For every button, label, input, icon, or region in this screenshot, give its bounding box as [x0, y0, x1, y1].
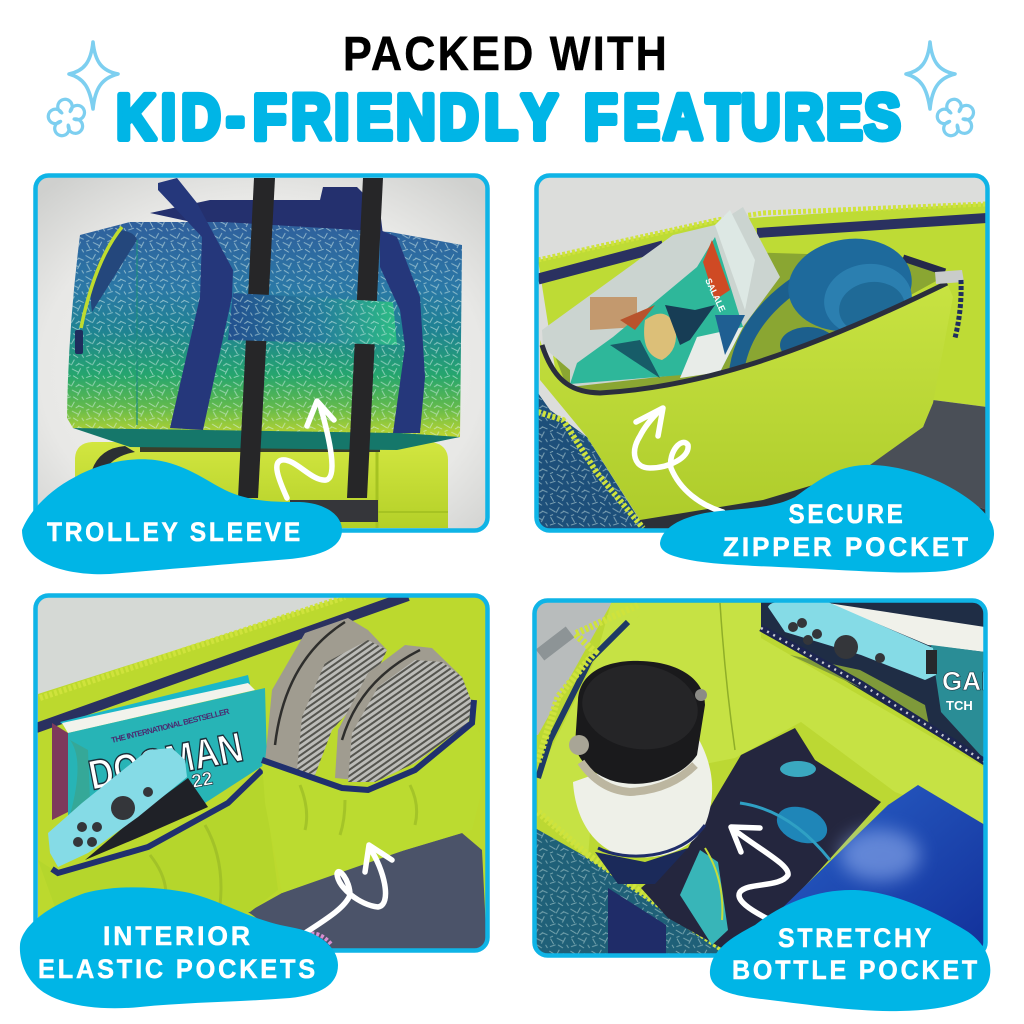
callout: trolley sleeve	[22, 459, 342, 574]
panel: interior elastic pockets	[20, 596, 488, 1008]
left wall and zippers	[538, 605, 721, 948]
front pocket	[540, 270, 964, 520]
book	[52, 675, 267, 820]
lining	[38, 596, 487, 950]
right slipper	[335, 645, 472, 782]
green interior	[538, 203, 987, 420]
arrow	[277, 401, 334, 498]
back straps	[150, 187, 383, 235]
label text: INTERIOR	[103, 921, 253, 951]
bottle	[569, 657, 712, 884]
label text: BOTTLE POCKET	[732, 955, 980, 985]
label text: ELASTIC POCKETS	[38, 954, 318, 984]
inner lining	[590, 603, 985, 826]
snack bag: SALALE	[703, 277, 727, 313]
heading: kid-friendly features: KID-FRIENDLY FEATURES	[116, 81, 901, 153]
callout: trolley sleeve: TROLLEY SLEEVE	[47, 517, 303, 547]
arrow	[731, 827, 788, 920]
panel: stretchy bottle pocket	[534, 600, 997, 1011]
left strap	[158, 178, 233, 430]
arrow	[635, 408, 723, 512]
suitcase	[75, 442, 448, 528]
top pocket: TCH	[946, 698, 973, 713]
shirt with rockets	[641, 728, 881, 950]
book: THE INTERNATIONAL BESTSELLER	[110, 707, 231, 745]
dark gap under bag	[639, 485, 986, 528]
zipper tape	[36, 596, 408, 728]
panel: trolley sleeve	[22, 176, 488, 574]
panel: secure zipper pocket	[536, 176, 994, 573]
arrow	[302, 845, 392, 935]
left elastic pocket	[50, 768, 263, 912]
switch console	[768, 602, 937, 680]
callout: secure zipper pocket	[660, 465, 994, 573]
label text	[732, 923, 980, 985]
right elastic pocket	[262, 700, 482, 893]
headphones	[737, 231, 918, 368]
label text: ZIPPER POCKET	[723, 532, 971, 562]
top pocket: GAL	[942, 666, 997, 696]
top pocket	[761, 602, 997, 765]
book: 22	[190, 768, 215, 793]
blue box	[775, 785, 985, 956]
exterior fabric	[535, 828, 721, 956]
label text: STRETCHY	[778, 923, 934, 953]
trolley poles	[238, 178, 383, 498]
snack bag	[542, 207, 780, 387]
switch console	[48, 748, 208, 867]
shirt	[248, 833, 487, 950]
icon: left sparkle and flower	[46, 42, 118, 138]
bag body	[67, 222, 462, 450]
callout: interior elastic pockets	[20, 887, 338, 1008]
label text: SECURE	[788, 499, 906, 529]
pocket interior	[545, 250, 947, 395]
heading: packed with: PACKED WITH	[343, 28, 669, 81]
label text	[723, 499, 971, 562]
icon: right sparkle and flower	[906, 42, 977, 138]
book: DOGMAN	[85, 723, 247, 799]
shirt	[867, 400, 987, 510]
right strap	[380, 230, 425, 433]
trolley sleeve band	[228, 293, 397, 345]
title	[116, 28, 901, 153]
bag exterior	[538, 393, 646, 530]
label text	[38, 921, 318, 984]
left slipper	[265, 618, 387, 775]
zipper tape	[538, 204, 987, 279]
callout: stretchy bottle pocket	[710, 890, 990, 1011]
